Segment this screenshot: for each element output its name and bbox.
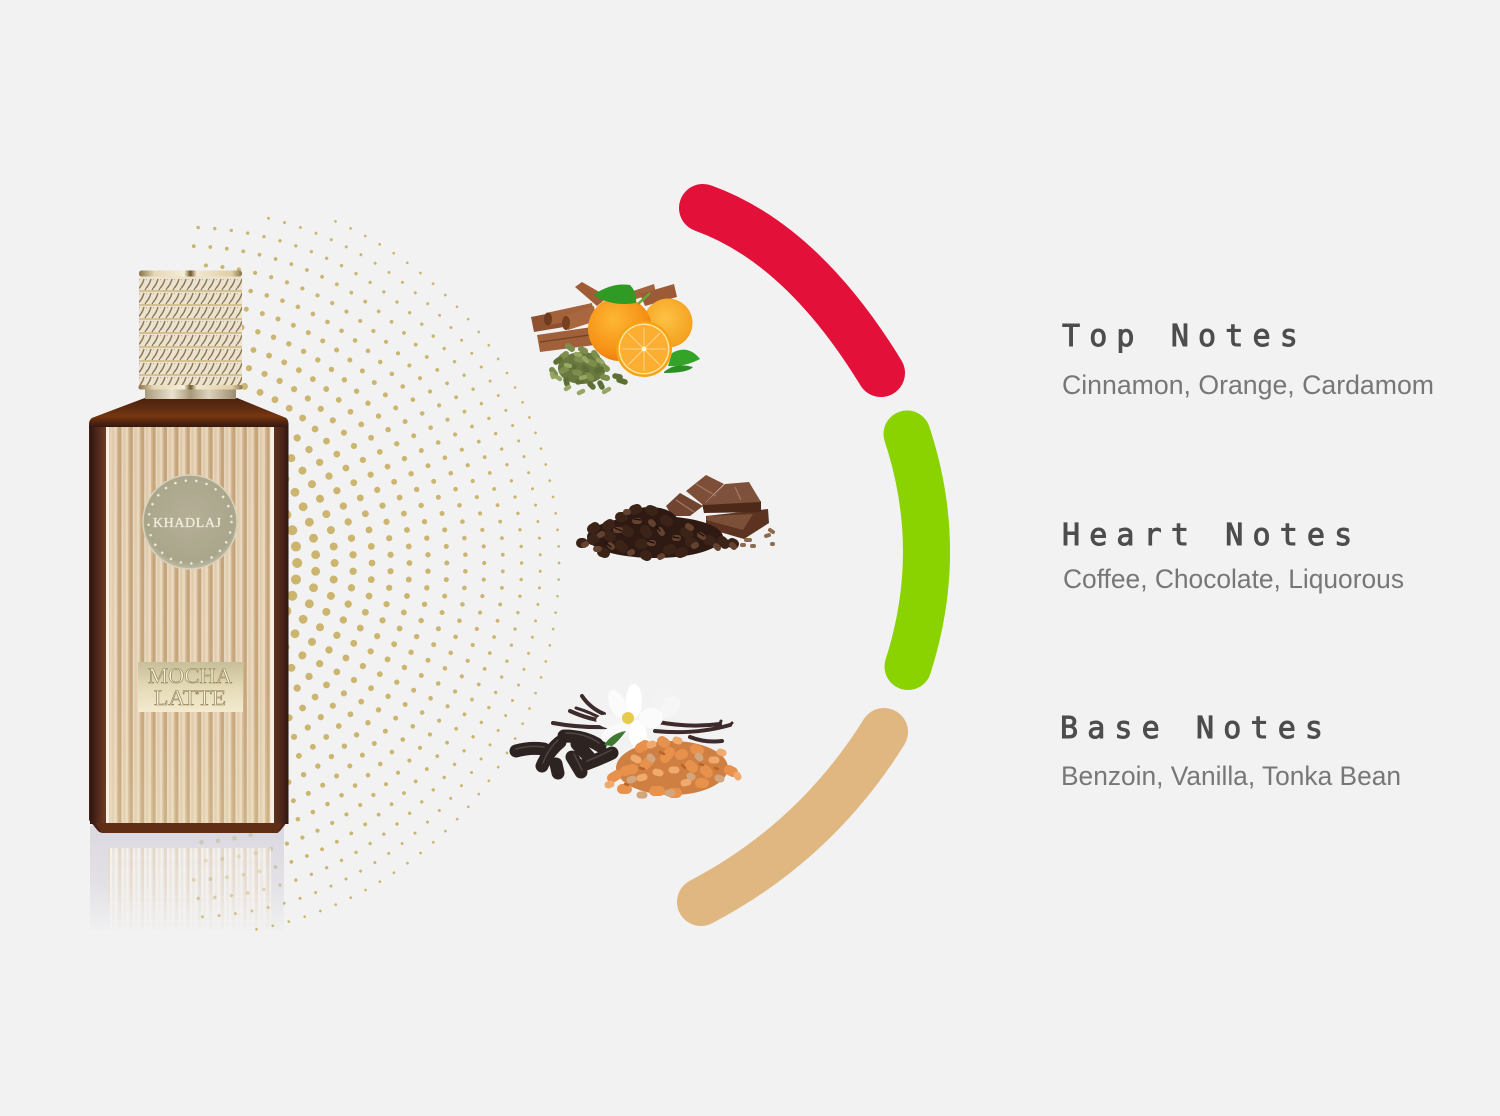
orange slice <box>616 321 672 377</box>
vanilla pods <box>553 696 732 742</box>
white flower <box>595 684 684 751</box>
bottle glass body <box>89 398 288 833</box>
product name label <box>138 662 243 712</box>
base notes text: Base Notes <box>1060 711 1332 746</box>
cardamom pile <box>552 346 625 393</box>
orange front <box>588 297 652 361</box>
base notes text <box>1060 711 1401 791</box>
heart notes text <box>1062 518 1404 594</box>
product name label: MOCHA <box>148 663 232 688</box>
bottle cap <box>138 270 242 390</box>
heart notes text: Coffee, Chocolate, Liquorous <box>1063 564 1404 594</box>
green leaves <box>593 284 700 373</box>
chocolate blocks <box>666 475 769 539</box>
top notes text: Top Notes <box>1062 319 1307 354</box>
bottle reflection <box>90 826 284 930</box>
base notes text: Benzoin, Vanilla, Tonka Bean <box>1061 761 1401 791</box>
arc: top notes (red) <box>703 208 881 373</box>
medallion: KHADLAJ <box>153 516 222 531</box>
top notes text: Cinnamon, Orange, Cardamom <box>1062 370 1434 400</box>
medallion <box>143 475 237 569</box>
bottle neck <box>145 388 236 399</box>
product name label: LATTE <box>154 685 226 710</box>
heart notes text: Heart Notes <box>1062 518 1361 553</box>
cinnamon sticks <box>531 282 677 352</box>
coffee bean pile <box>581 507 734 558</box>
ingredients: coffee, chocolate <box>581 475 773 558</box>
bottle shoulder <box>89 398 288 428</box>
arc: heart notes (green) <box>907 434 927 666</box>
top notes text <box>1062 319 1434 400</box>
arc: base notes (tan) <box>701 732 884 902</box>
orange back <box>644 298 692 348</box>
benzoin chips <box>608 740 738 795</box>
tonka beans <box>516 733 612 773</box>
ingredients: benzoin, vanilla, tonka <box>516 684 738 795</box>
cocoa crumbs <box>742 530 773 546</box>
striped gold panel <box>106 427 274 823</box>
ingredients: cinnamon, orange, cardamom <box>531 282 700 393</box>
perfume bottle <box>89 270 288 833</box>
halftone dot semicircle <box>190 217 559 930</box>
